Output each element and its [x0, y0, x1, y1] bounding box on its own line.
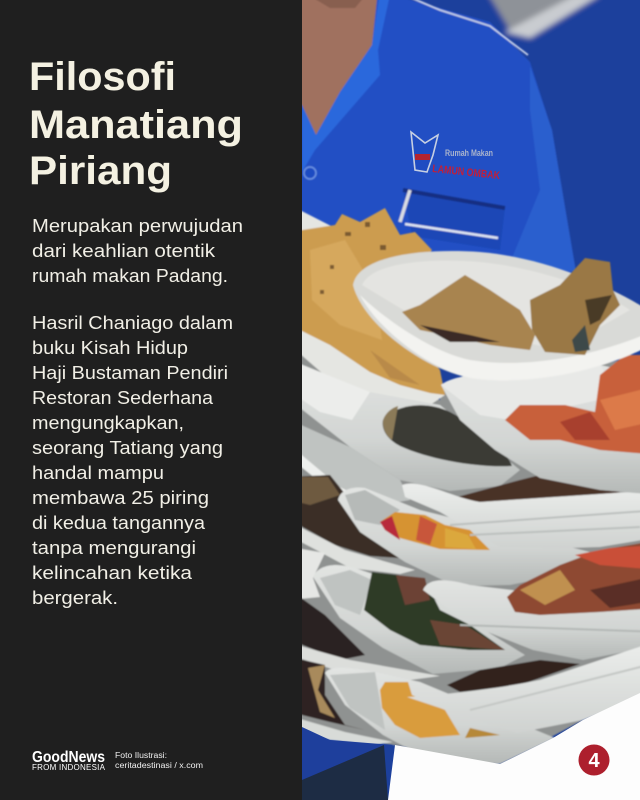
waiter shirt: [302, 0, 576, 273]
plate with greens: [313, 565, 525, 674]
wide plate: [402, 483, 640, 548]
logo: GoodNews from Indonesia: [32, 749, 106, 772]
text block: body: membawa 25 piring: [32, 488, 209, 508]
shirt logo: LAMUN OMBAK: [432, 163, 501, 182]
front upper plate: [407, 640, 640, 733]
text block: body: handal mampu: [32, 463, 164, 483]
shirt logo: [411, 132, 501, 182]
lower left food: [302, 659, 358, 728]
text block: body: seorang Tatiang yang: [32, 438, 223, 458]
photo: waiter carrying stacked plates: [280, 0, 640, 800]
greens and meat: [364, 572, 505, 650]
plate behind cracker: [302, 210, 445, 404]
panel: dark text column: [0, 0, 302, 800]
stack backing: [302, 354, 640, 747]
text block: body: kelincahan ketika: [32, 563, 193, 583]
text block: body: di kedua tangannya: [32, 513, 206, 533]
plate stack: [290, 205, 640, 764]
red fish food: [507, 540, 640, 615]
page number badge: [578, 744, 610, 776]
background: second person in blue: [280, 0, 640, 800]
text block: body: Hasril Chaniago dalam: [32, 313, 233, 333]
dark fish left: [302, 598, 366, 660]
top plate: [353, 251, 640, 380]
dark food left: [302, 474, 398, 558]
text block: intro: [32, 216, 243, 286]
shirt logo: Rumah Makan: [445, 148, 493, 158]
photo credit: Foto Ilustrasi:: [115, 751, 167, 760]
photo credit: [115, 751, 203, 770]
grey plate under fish: [302, 424, 410, 502]
text block: body: mengungkapkan,: [32, 413, 184, 433]
title: Manatiang: [29, 103, 243, 147]
dark food upper right of bottom plate: [447, 660, 580, 692]
page number badge: 4: [588, 750, 600, 772]
fried chicken: [402, 275, 535, 350]
text block: body: [32, 313, 233, 608]
fish: [383, 405, 512, 466]
plate with fish: [302, 393, 520, 492]
text block: body: bergerak.: [32, 588, 118, 608]
title: Piriang: [29, 149, 172, 193]
text block: body: buku Kisah Hidup: [32, 338, 188, 358]
title: Filosofi: [29, 55, 176, 99]
photo credit: ceritadestinasi / x.com: [115, 761, 203, 770]
dark food between plates: [459, 476, 620, 502]
text block: body: tanpa mengurangi: [32, 538, 196, 558]
shirt pocket: [403, 190, 505, 250]
shrimp plate: [441, 365, 640, 495]
left white sliver: [302, 548, 325, 600]
text block: intro: dari keahlian otentik: [32, 241, 216, 261]
text block: intro: Merupakan perwujudan: [32, 216, 243, 236]
red fish plate: [423, 580, 640, 660]
plate with orange food: [338, 488, 590, 586]
text block: intro: rumah makan Padang.: [32, 266, 228, 286]
cracker: [290, 208, 445, 395]
shrimp sauce food: [505, 355, 640, 455]
text block: body: Restoran Sederhana: [32, 388, 214, 408]
orange food bottom: [380, 682, 460, 738]
bottom: white table and dark trousers: [302, 693, 640, 800]
text block: body: Haji Bustaman Pendiri: [32, 363, 228, 383]
orange food: [380, 512, 490, 550]
bottom plate: [325, 668, 555, 764]
logo: GoodNews from Indonesia: FROM INDONESIA: [32, 763, 106, 772]
logo: GoodNews from Indonesia: GoodNews: [32, 749, 105, 766]
title: [29, 55, 243, 193]
